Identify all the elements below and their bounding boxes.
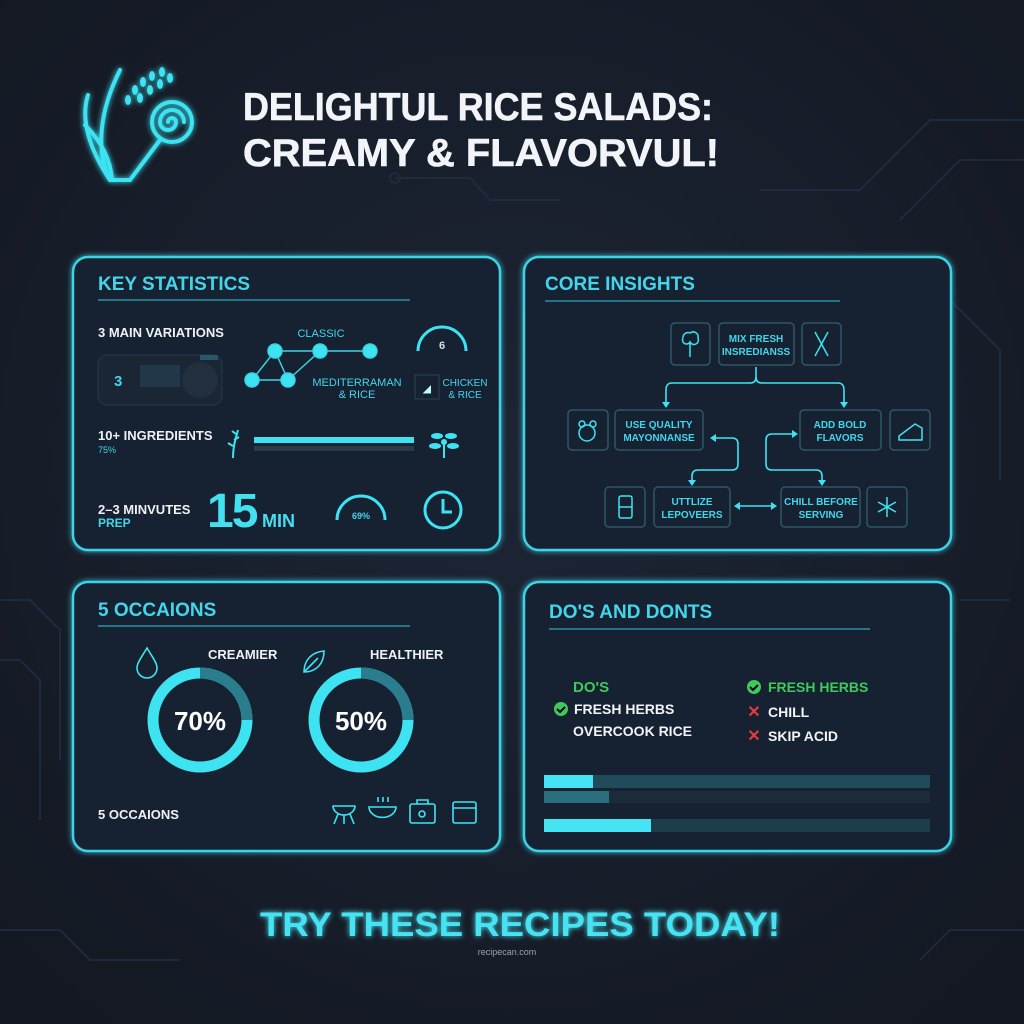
panel: core insights: FLAVORS bbox=[816, 433, 864, 444]
donut: 70% bbox=[153, 673, 247, 767]
icon: drop bbox=[137, 648, 157, 678]
panel: occasions: 5 OCCAIONS bbox=[98, 807, 179, 822]
panel: do's and donts: DO'S AND DONTS bbox=[549, 602, 712, 623]
panel: core insights: UTTLIZE bbox=[671, 497, 713, 508]
icons: insight boxes bbox=[579, 332, 922, 518]
gauge 6 bbox=[418, 327, 466, 351]
panel: key statistics: & RICE bbox=[448, 390, 482, 401]
icon: plant bbox=[429, 433, 459, 458]
panel: key statistics: 69% bbox=[352, 511, 370, 521]
panel: occasions: HEALTHIER bbox=[370, 647, 444, 662]
panel: key statistics: 3 MAIN VARIATIONS bbox=[98, 325, 224, 340]
panel: key statistics: 2–3 MINVUTES bbox=[98, 502, 191, 517]
donut: 50%: 50% bbox=[335, 706, 387, 736]
panel: occasions: 5 OCCAIONS bbox=[98, 600, 216, 621]
panel: core insights: LEPOVEERS bbox=[661, 510, 723, 521]
panel: key statistics: 15 bbox=[207, 485, 258, 538]
panel: key statistics: 75% bbox=[98, 445, 116, 455]
title bbox=[243, 86, 719, 175]
panel: do's and donts: ✕ bbox=[747, 728, 761, 745]
donut: 50% bbox=[314, 673, 408, 767]
donut: 70%: 70% bbox=[174, 706, 226, 736]
title: DELIGHTUL RICE SALADS: bbox=[243, 86, 713, 129]
bar: ingredients bbox=[254, 437, 414, 443]
panel: key statistics: CHICKEN bbox=[442, 378, 488, 389]
bar chart bbox=[544, 775, 930, 832]
panel: do's and donts: FRESH HERBS bbox=[768, 679, 868, 695]
panel: key statistics: ◢ bbox=[422, 384, 431, 395]
icon: clock bbox=[425, 492, 461, 528]
panel: key statistics: 6 bbox=[439, 340, 445, 352]
panel: do's and donts bbox=[524, 582, 951, 851]
panel: core insights: USE QUALITY bbox=[625, 420, 693, 431]
panel: core insights bbox=[524, 257, 951, 550]
icon: herb bbox=[228, 430, 239, 458]
panel: key statistics: & RICE bbox=[339, 389, 375, 401]
panel: key statistics: 10+ INGREDIENTS bbox=[98, 428, 213, 443]
panel: key statistics: CLASSIC bbox=[297, 328, 345, 340]
panel: key statistics: PREP bbox=[98, 516, 131, 530]
panel: do's and donts: CHILL bbox=[768, 704, 810, 720]
panel: key statistics: 3 bbox=[114, 373, 122, 390]
panel: occasions: CREAMIER bbox=[208, 647, 278, 662]
heading: key statistics: KEY STATISTICS bbox=[98, 274, 250, 295]
panel: key statistics: MEDITERRAMAN bbox=[312, 377, 402, 389]
panel: key statistics: MIN bbox=[262, 511, 295, 531]
footer call to action: TRY THESE RECIPES TODAY! bbox=[260, 906, 780, 944]
panel: core insights: ADD BOLD bbox=[814, 420, 866, 431]
panel: key statistics bbox=[73, 257, 500, 550]
panel: core insights: INSREDIANSS bbox=[722, 347, 790, 358]
panel: do's and donts: OVERCOOK RICE bbox=[573, 723, 692, 739]
panel: core insights: SERVING bbox=[799, 510, 844, 521]
panel: occasions bbox=[73, 582, 500, 851]
logo: rice stalk and swirl bbox=[85, 67, 192, 180]
panel: core insights: MIX FRESH bbox=[729, 334, 783, 345]
icon: leaf bbox=[304, 651, 324, 672]
source url: recipecan.com bbox=[478, 947, 536, 957]
panel: do's and donts: SKIP ACID bbox=[768, 728, 838, 744]
panel: do's and donts: FRESH HERBS bbox=[574, 701, 674, 717]
title: CREAMY & FLAVORVUL! bbox=[243, 132, 719, 175]
panel: core insights: CHILL BEFORE bbox=[784, 497, 858, 508]
panel: core insights: CORE INSIGHTS bbox=[545, 274, 695, 295]
icons: occasions bbox=[333, 797, 476, 824]
network chart bbox=[245, 344, 377, 387]
panel: core insights: MAYONNANSE bbox=[623, 433, 695, 444]
panel: do's and donts: ✕ bbox=[747, 704, 761, 721]
panel: do's and donts: DO'S bbox=[573, 679, 609, 696]
